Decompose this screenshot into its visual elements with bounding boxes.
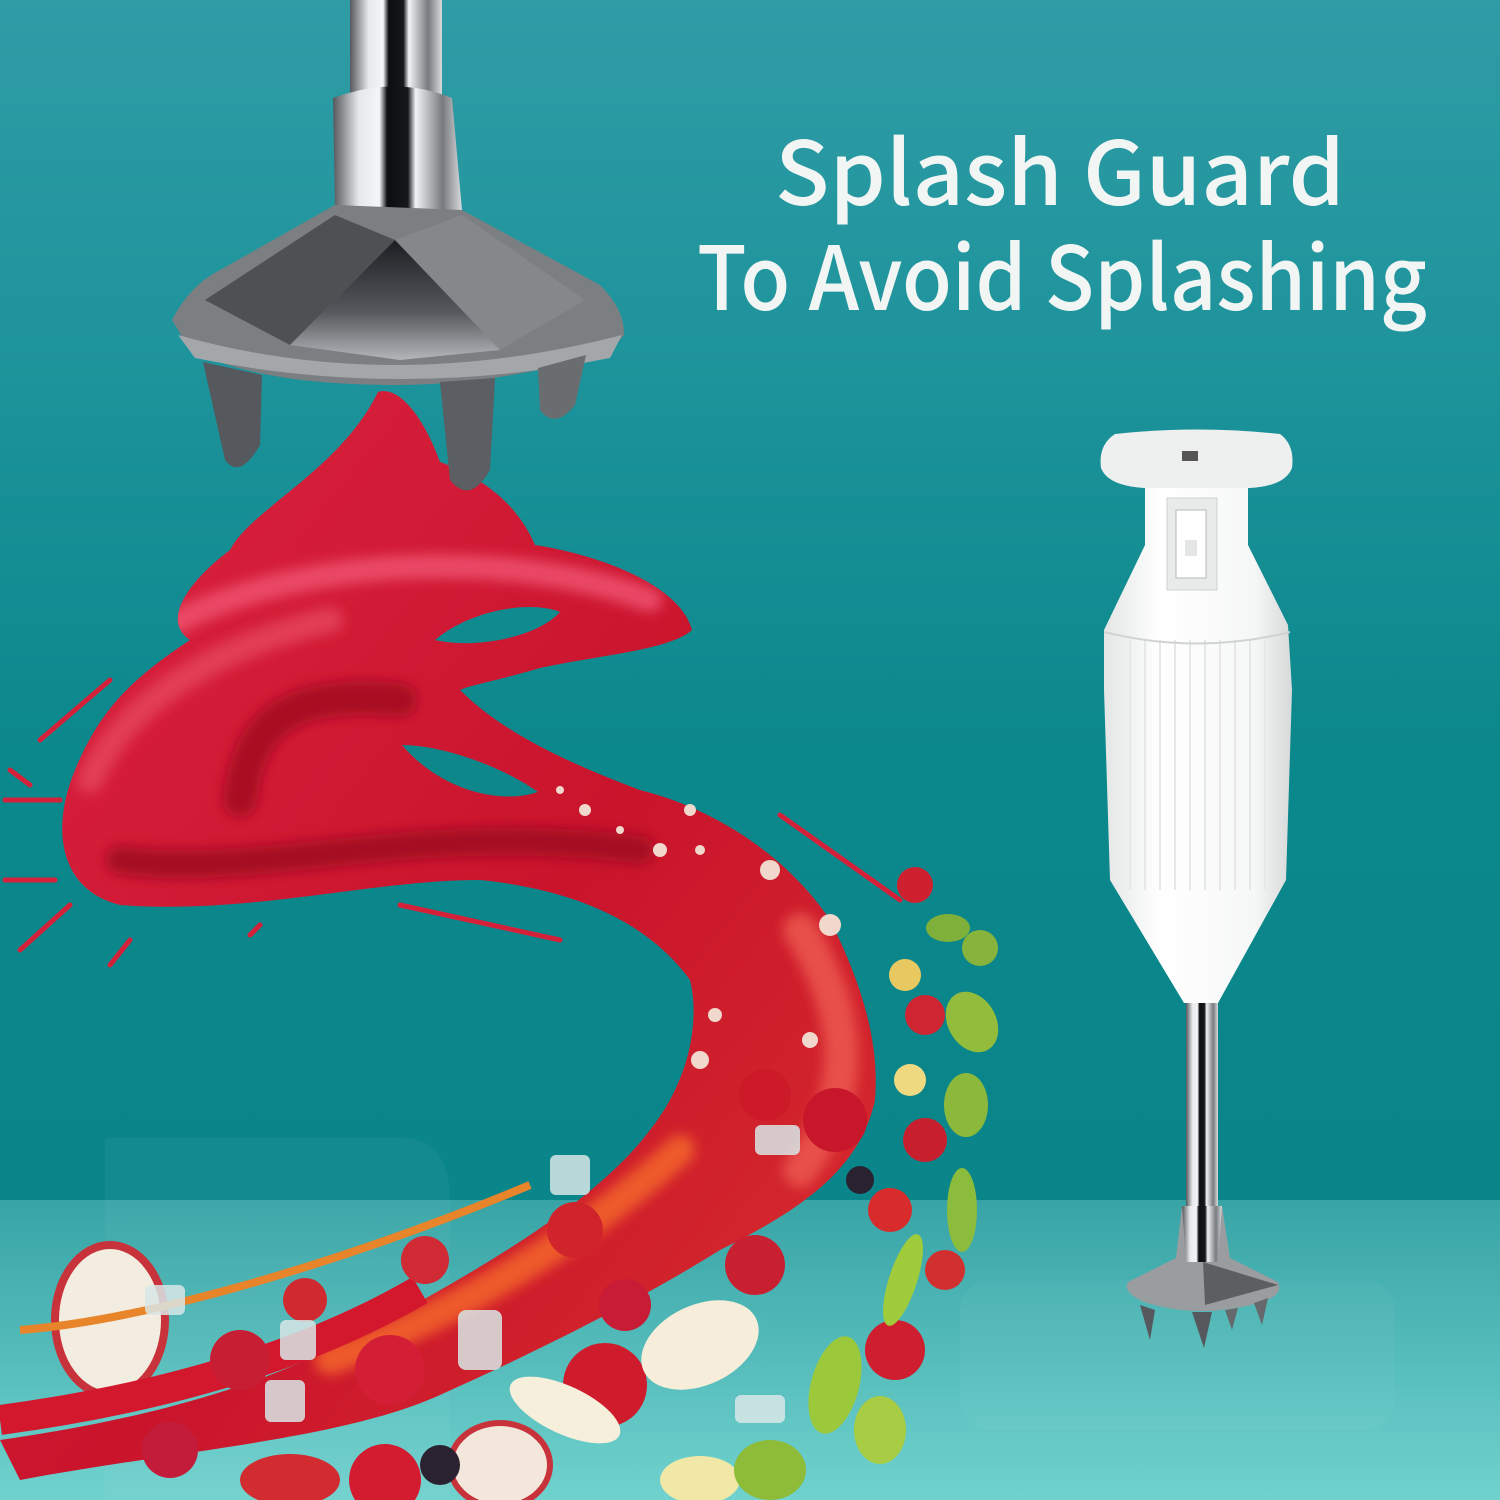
floor surface bbox=[0, 1200, 1500, 1500]
blender top cap bbox=[1101, 430, 1292, 488]
guard legs bbox=[203, 362, 262, 467]
swirl gaps bbox=[435, 607, 560, 643]
steel shaft bbox=[1186, 1003, 1218, 1208]
juice drips and splashes bbox=[5, 680, 900, 965]
hand blender product bbox=[1101, 430, 1292, 1348]
blender neck and body bbox=[1104, 488, 1292, 1003]
title: To Avoid Splashing bbox=[697, 209, 1427, 336]
faint watermark bbox=[105, 1138, 1395, 1500]
fruit pieces bbox=[0, 867, 1009, 1500]
speckles on swirl bbox=[556, 786, 841, 1069]
title bbox=[697, 104, 1427, 336]
splash guard close-up bbox=[172, 0, 624, 490]
title: Splash Guard bbox=[775, 104, 1345, 231]
red juice swirl bbox=[0, 391, 876, 1480]
mini splash guard bbox=[1127, 1206, 1279, 1311]
ribbed grip bbox=[1130, 640, 1265, 890]
switch bbox=[1167, 498, 1217, 590]
swirl shading bbox=[90, 566, 841, 1360]
